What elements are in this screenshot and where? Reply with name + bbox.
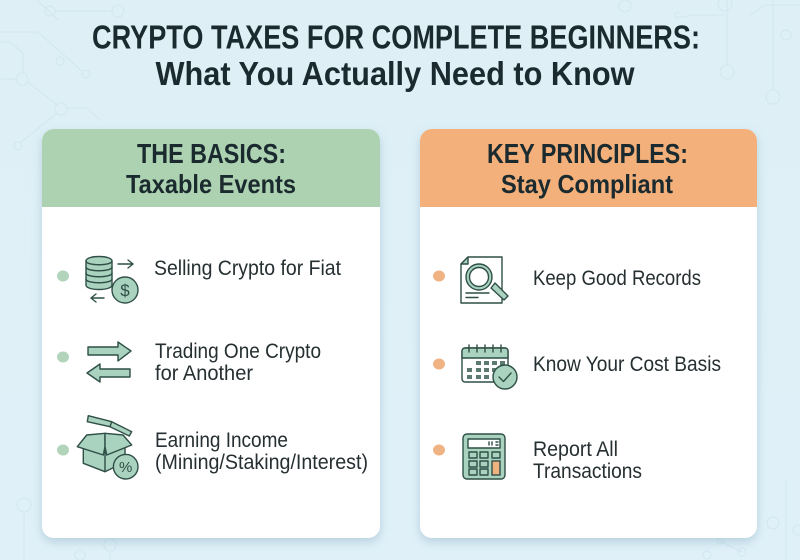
item: trading one crypto for another: for Another xyxy=(155,362,253,385)
icon: calculator xyxy=(463,434,505,479)
item: know your cost basis xyxy=(433,345,721,389)
item: report all transactions: Report All xyxy=(533,438,618,461)
title xyxy=(92,18,700,92)
icon: document with magnifier xyxy=(461,257,508,303)
item: trading one crypto for another: Trading One Crypto xyxy=(155,340,321,363)
item: selling crypto for fiat xyxy=(57,256,341,303)
panel: key principles xyxy=(420,129,757,538)
icon: coins to dollar xyxy=(86,256,138,303)
title: What You Actually Need to Know xyxy=(156,55,635,92)
icon: open box with percent xyxy=(77,416,138,479)
panel header: key principles: Stay Compliant xyxy=(501,169,673,199)
icon: open box with percent: % xyxy=(119,459,132,476)
item: know your cost basis: Know Your Cost Basis xyxy=(533,353,721,376)
item: report all transactions: Transactions xyxy=(533,460,642,483)
item: earning income xyxy=(57,416,368,479)
panel: the basics xyxy=(42,129,380,538)
item: report all transactions xyxy=(433,434,642,483)
item: selling crypto for fiat: Selling Crypto for Fiat xyxy=(154,257,341,280)
item: earning income: Earning Income xyxy=(155,429,288,452)
panel header: key principles: KEY PRINCIPLES: xyxy=(487,138,688,169)
icon: coins to dollar: $ xyxy=(120,281,130,300)
item: keep good records xyxy=(433,257,701,303)
item: earning income: (Mining/Staking/Interest) xyxy=(155,451,368,474)
panel header: the basics: THE BASICS: xyxy=(137,138,286,169)
panel header: the basics xyxy=(42,129,380,207)
item: keep good records: Keep Good Records xyxy=(533,267,701,290)
icon: calendar with check xyxy=(462,345,517,389)
item: trading one crypto for another xyxy=(57,340,321,385)
panel header: key principles xyxy=(420,129,757,207)
panel header: the basics: Taxable Events xyxy=(126,169,296,199)
icon: swap arrows xyxy=(87,342,131,382)
